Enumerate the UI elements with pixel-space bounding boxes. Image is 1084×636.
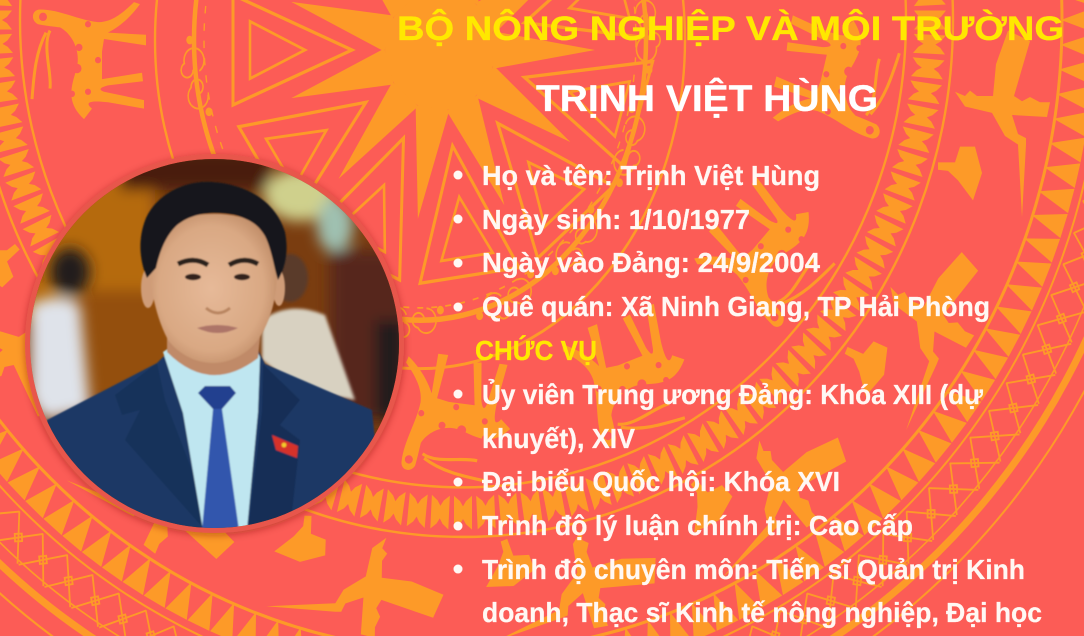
qualifications continued: doanh, Thạc sĩ Kinh tế nông nghiệp, Đại học [482, 597, 1042, 628]
biography list [454, 160, 1042, 628]
full name: Họ và tên: Trịnh Việt Hùng [482, 160, 820, 191]
political theory: Trình độ lý luận chính trị: Cao cấp [482, 510, 913, 541]
bullet markers [454, 171, 462, 573]
spiral ornaments [177, 0, 661, 339]
portrait photo in circle [25, 150, 410, 540]
hometown: Quê quán: Xã Ninh Giang, TP Hải Phòng [482, 291, 990, 322]
ears [141, 268, 285, 308]
brows, eyes, nose, lips [178, 260, 258, 333]
date of birth: Ngày sinh: 1/10/1977 [482, 204, 750, 235]
central committee continued: khuyết), XIV [482, 423, 635, 454]
central committee: Ủy viên Trung ương Đảng: Khóa XIII (dự [482, 378, 984, 410]
tie [198, 386, 239, 530]
background: inner rings [155, 0, 685, 369]
heading: person name: TRỊNH VIỆT HÙNG [536, 77, 878, 119]
deer ring [32, 2, 904, 483]
suit [46, 352, 376, 528]
blurred person right [262, 254, 355, 400]
photo backdrop [25, 150, 410, 535]
blurred person left [30, 248, 90, 420]
hair [140, 182, 287, 280]
qualifications: Trình độ chuyên môn: Tiến sĩ Quản trị Kinh [482, 554, 1025, 585]
neck [166, 336, 261, 376]
small birds [0, 147, 982, 596]
section label: position: CHỨC VỤ [475, 335, 597, 366]
shirt [163, 346, 260, 530]
background: central star [233, 0, 653, 283]
portrait ring [25, 154, 404, 533]
title: ministry name: BỘ NÔNG NGHIỆP VÀ MÔI TRƯỜNG [397, 9, 1064, 48]
party entry date: Ngày vào Đảng: 24/9/2004 [482, 247, 820, 278]
national assembly: Đại biểu Quốc hội: Khóa XVI [482, 466, 840, 497]
face [151, 214, 277, 363]
pin [272, 435, 298, 458]
